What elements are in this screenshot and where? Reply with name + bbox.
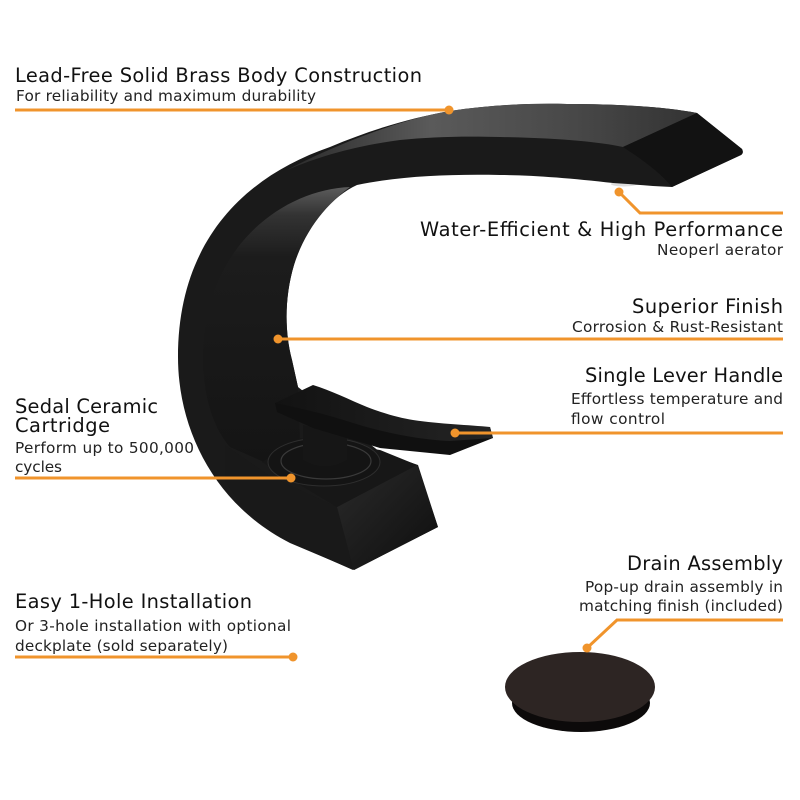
leader line — [15, 476, 291, 480]
subtext: flow control — [571, 410, 665, 428]
leader line — [15, 108, 449, 112]
callout: solid brass body — [15, 64, 454, 114]
callout: superior finish — [274, 295, 783, 344]
heading: Sedal Ceramic — [15, 395, 158, 418]
leader line — [455, 432, 783, 434]
cartridge ring — [268, 438, 380, 486]
leader dot — [274, 334, 282, 344]
leader line — [15, 656, 293, 658]
leader line — [278, 338, 783, 340]
heading: Easy 1-Hole Installation — [15, 590, 252, 613]
drain stopper — [505, 652, 655, 732]
heading: Cartridge — [15, 414, 110, 437]
heading: Water-Efficient & High Performance — [420, 218, 783, 241]
subtext: deckplate (sold separately) — [15, 637, 228, 655]
subtext: Or 3-hole installation with optional — [15, 617, 291, 635]
subtext: For reliability and maximum durability — [16, 87, 316, 105]
leader dot — [286, 474, 296, 482]
lever post — [303, 425, 347, 466]
subtext: Neoperl aerator — [657, 241, 784, 259]
stopper lower lip — [512, 674, 650, 732]
base front face — [337, 465, 438, 570]
leader line — [587, 620, 783, 648]
leader dot — [288, 652, 298, 662]
heading: Superior Finish — [632, 295, 783, 318]
callout: water-efficient — [420, 188, 784, 259]
subtext: Corrosion & Rust-Resistant — [572, 318, 783, 336]
faucet body silhouette — [178, 104, 743, 570]
leader line — [619, 192, 783, 213]
heading: Drain Assembly — [627, 552, 783, 575]
callout: drain assembly — [579, 552, 783, 652]
spout tip facet — [623, 113, 743, 187]
leader dot — [582, 644, 592, 652]
subtext: matching finish (included) — [579, 597, 783, 615]
base left face — [225, 445, 353, 570]
callout: easy installation — [15, 590, 298, 662]
callout: single lever handle — [450, 364, 783, 438]
aerator — [611, 182, 637, 186]
leader dot — [444, 106, 454, 114]
callout: ceramic cartridge — [15, 395, 296, 482]
inner back panel — [203, 187, 350, 467]
subtext: Effortless temperature and — [571, 390, 783, 408]
subtext: cycles — [15, 458, 62, 476]
faucet — [178, 104, 743, 570]
heading: Single Lever Handle — [585, 364, 783, 387]
lever handle — [275, 385, 493, 455]
base top plate — [262, 438, 417, 507]
stopper cap — [505, 652, 655, 722]
spout top highlight — [287, 104, 697, 170]
heading: Lead-Free Solid Brass Body Construction — [15, 64, 422, 87]
leader dot — [450, 428, 460, 438]
subtext: Perform up to 500,000 — [15, 439, 194, 457]
subtext: Pop-up drain assembly in — [585, 578, 783, 596]
leader dot — [614, 188, 624, 196]
